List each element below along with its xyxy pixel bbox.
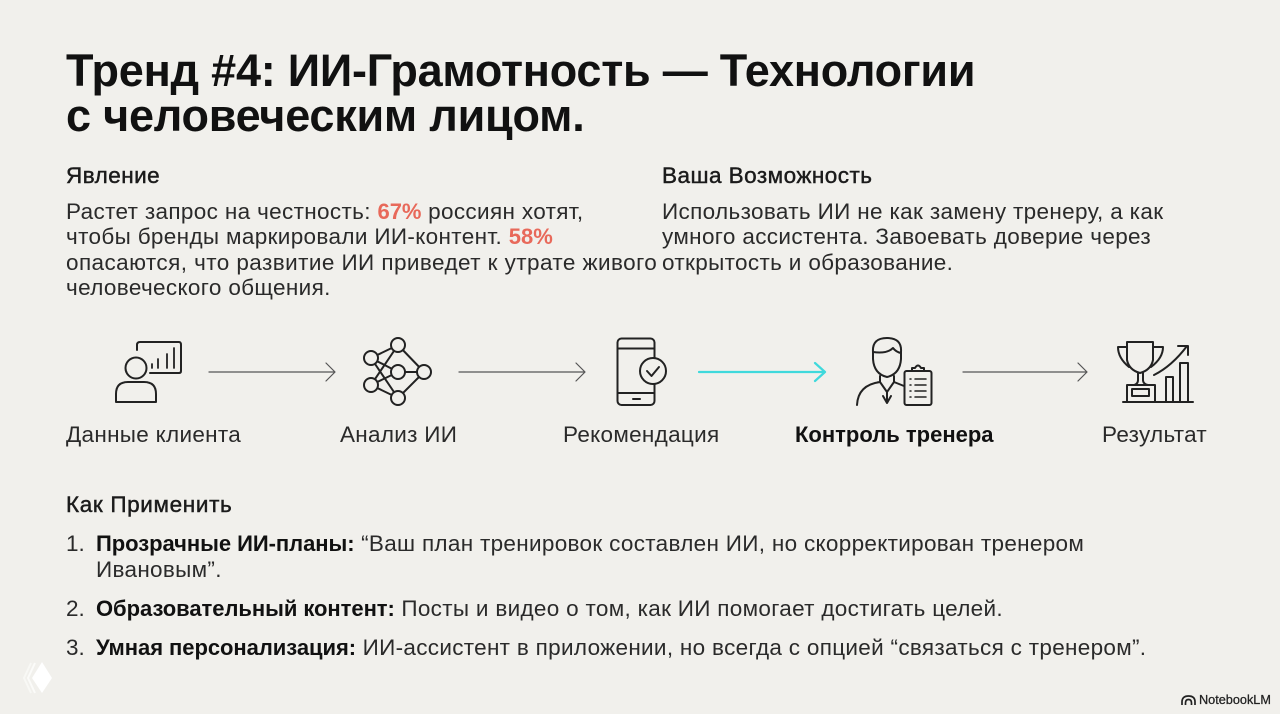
text block: Явление: Растет запрос на честность: 67% россиян хотят, — [66, 199, 584, 224]
icon: white diamond logo — [24, 662, 52, 693]
label: Контроль тренера: Контроль тренера — [795, 422, 994, 447]
text block: Ваша Возможность: открытость и образование. — [662, 250, 953, 275]
text block: Ваша Возможность: умного ассистента. Завоевать доверие через — [662, 224, 1151, 249]
arrow: analysis to recommendation — [459, 363, 585, 381]
label: Анализ ИИ: Анализ ИИ — [340, 422, 457, 447]
icon: trophy and growth chart — [1118, 342, 1193, 402]
heading: Как Применить: Как Применить — [66, 492, 232, 517]
arrow: trainer to result — [963, 363, 1087, 381]
arrow: client to analysis — [209, 363, 335, 381]
title — [66, 45, 975, 141]
label: Рекомендация: Рекомендация — [563, 422, 719, 447]
text block: Явление: опасаются, что развитие ИИ приведет к утрате живого — [66, 250, 657, 275]
icon: client with data chart — [116, 342, 181, 402]
text block: Ваша Возможность — [662, 199, 1164, 275]
icon: neural network — [364, 338, 431, 405]
list item 3: Умная персонализация: ИИ-ассистент в приложении, но всегда с опцией “связаться с тренером”. — [96, 635, 1146, 660]
text block: Явление — [66, 199, 657, 300]
list item 1: Прозрачные ИИ-планы: “Ваш план тренировок составлен ИИ, но скорректирован тренером — [96, 531, 1084, 556]
heading: Явление: Явление — [66, 163, 160, 188]
icon: phone with check — [618, 338, 666, 405]
list item 1: Ивановым”. — [96, 557, 222, 582]
heading: Ваша Возможность: Ваша Возможность — [662, 163, 872, 188]
list item 2: 2. — [66, 596, 85, 621]
list item 1: 1. — [66, 531, 85, 556]
icon: trainer with clipboard — [857, 338, 932, 405]
label: Данные клиента: Данные клиента — [66, 422, 241, 447]
title: Тренд #4: ИИ-Грамотность — Технологии — [66, 45, 975, 96]
text block: Явление: человеческого общения. — [66, 275, 331, 300]
title: с человеческим лицом. — [66, 90, 584, 141]
text block: Явление: чтобы бренды маркировали ИИ-контент. 58% — [66, 224, 553, 249]
watermark: NotebookLM: NotebookLM — [1199, 693, 1271, 707]
list item 3: 3. — [66, 635, 85, 660]
text block: Ваша Возможность: Использовать ИИ не как замену тренеру, а как — [662, 199, 1163, 224]
arrow: recommendation to trainer (highlighted) — [699, 363, 825, 381]
list item 2: Образовательный контент: Посты и видео о том, как ИИ помогает достигать целей. — [96, 596, 1003, 621]
label: Результат: Результат — [1102, 422, 1207, 447]
list item 1 — [66, 531, 1084, 582]
